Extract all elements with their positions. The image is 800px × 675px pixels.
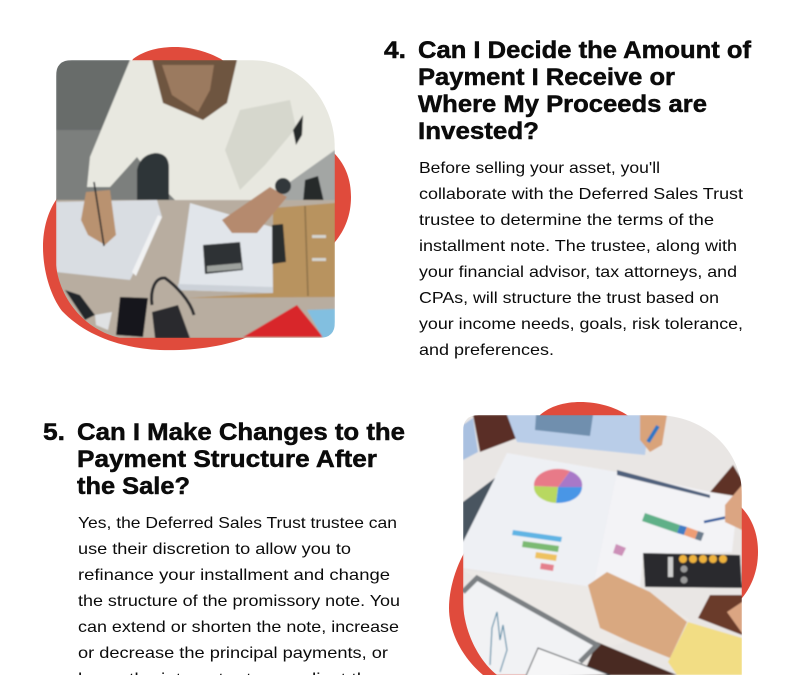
heading lines <box>418 37 752 145</box>
red blob behind photo 1 <box>43 47 351 350</box>
section 5: body text <box>78 515 400 675</box>
heading lines: Can I Make Changes to the <box>77 419 405 446</box>
calculator phone <box>643 553 742 588</box>
hand and sleeve <box>588 572 742 675</box>
section 4: body text: collaborate with the Deferred Sales Trust <box>419 186 744 203</box>
heading lines <box>77 419 405 500</box>
heading lines: Can I Decide the Amount of <box>418 37 752 64</box>
section 5: body text: use their discretion to allow you to <box>78 541 351 558</box>
section 5: body text: Yes, the Deferred Sales Trust trustee can <box>78 515 397 532</box>
section 4: body text: your financial advisor, tax attorneys, and <box>419 264 737 281</box>
section 4: body text: trustee to determine the terms of the <box>419 212 714 229</box>
heading lines: Payment I Receive or <box>418 64 675 91</box>
section 4: body text: Before selling your asset, you'll <box>419 160 660 177</box>
tablet with chart <box>463 577 610 675</box>
heading lines: Where My Proceeds are <box>418 91 707 118</box>
red blob behind photo 2 <box>449 402 758 675</box>
section 5: body text: can extend or shorten the note, increase <box>78 619 399 636</box>
photo: man working at desk <box>56 60 335 338</box>
section 5: body text: or decrease the principal payments, or <box>78 645 389 662</box>
bar charts on paper <box>512 513 704 571</box>
section 4: body text: and preferences. <box>419 342 554 359</box>
pie chart <box>534 469 582 503</box>
heading lines: Invested? <box>418 118 539 145</box>
number 4: 4. <box>384 37 406 64</box>
heading lines: Payment Structure After <box>77 446 377 473</box>
section 4: body text <box>419 160 744 359</box>
section 5: question heading <box>43 419 405 500</box>
section 4: body text: CPAs, will structure the trust based on <box>419 290 719 307</box>
heading lines: the Sale? <box>77 473 190 500</box>
number 5: 5. <box>43 419 65 446</box>
section 4: body text: your income needs, goals, risk tolerance, <box>419 316 743 333</box>
section 5: body text: the structure of the promissory note. You <box>78 593 400 610</box>
section 5: photo with red blob <box>449 402 758 675</box>
photo: hands over charts and calculator <box>463 415 742 675</box>
section 4: body text: installment note. The trustee, along with <box>419 238 737 255</box>
section 4: photo with red blob <box>43 47 351 350</box>
section 5: body text: refinance your installment and change <box>78 567 390 584</box>
section 4: question heading <box>384 37 752 145</box>
